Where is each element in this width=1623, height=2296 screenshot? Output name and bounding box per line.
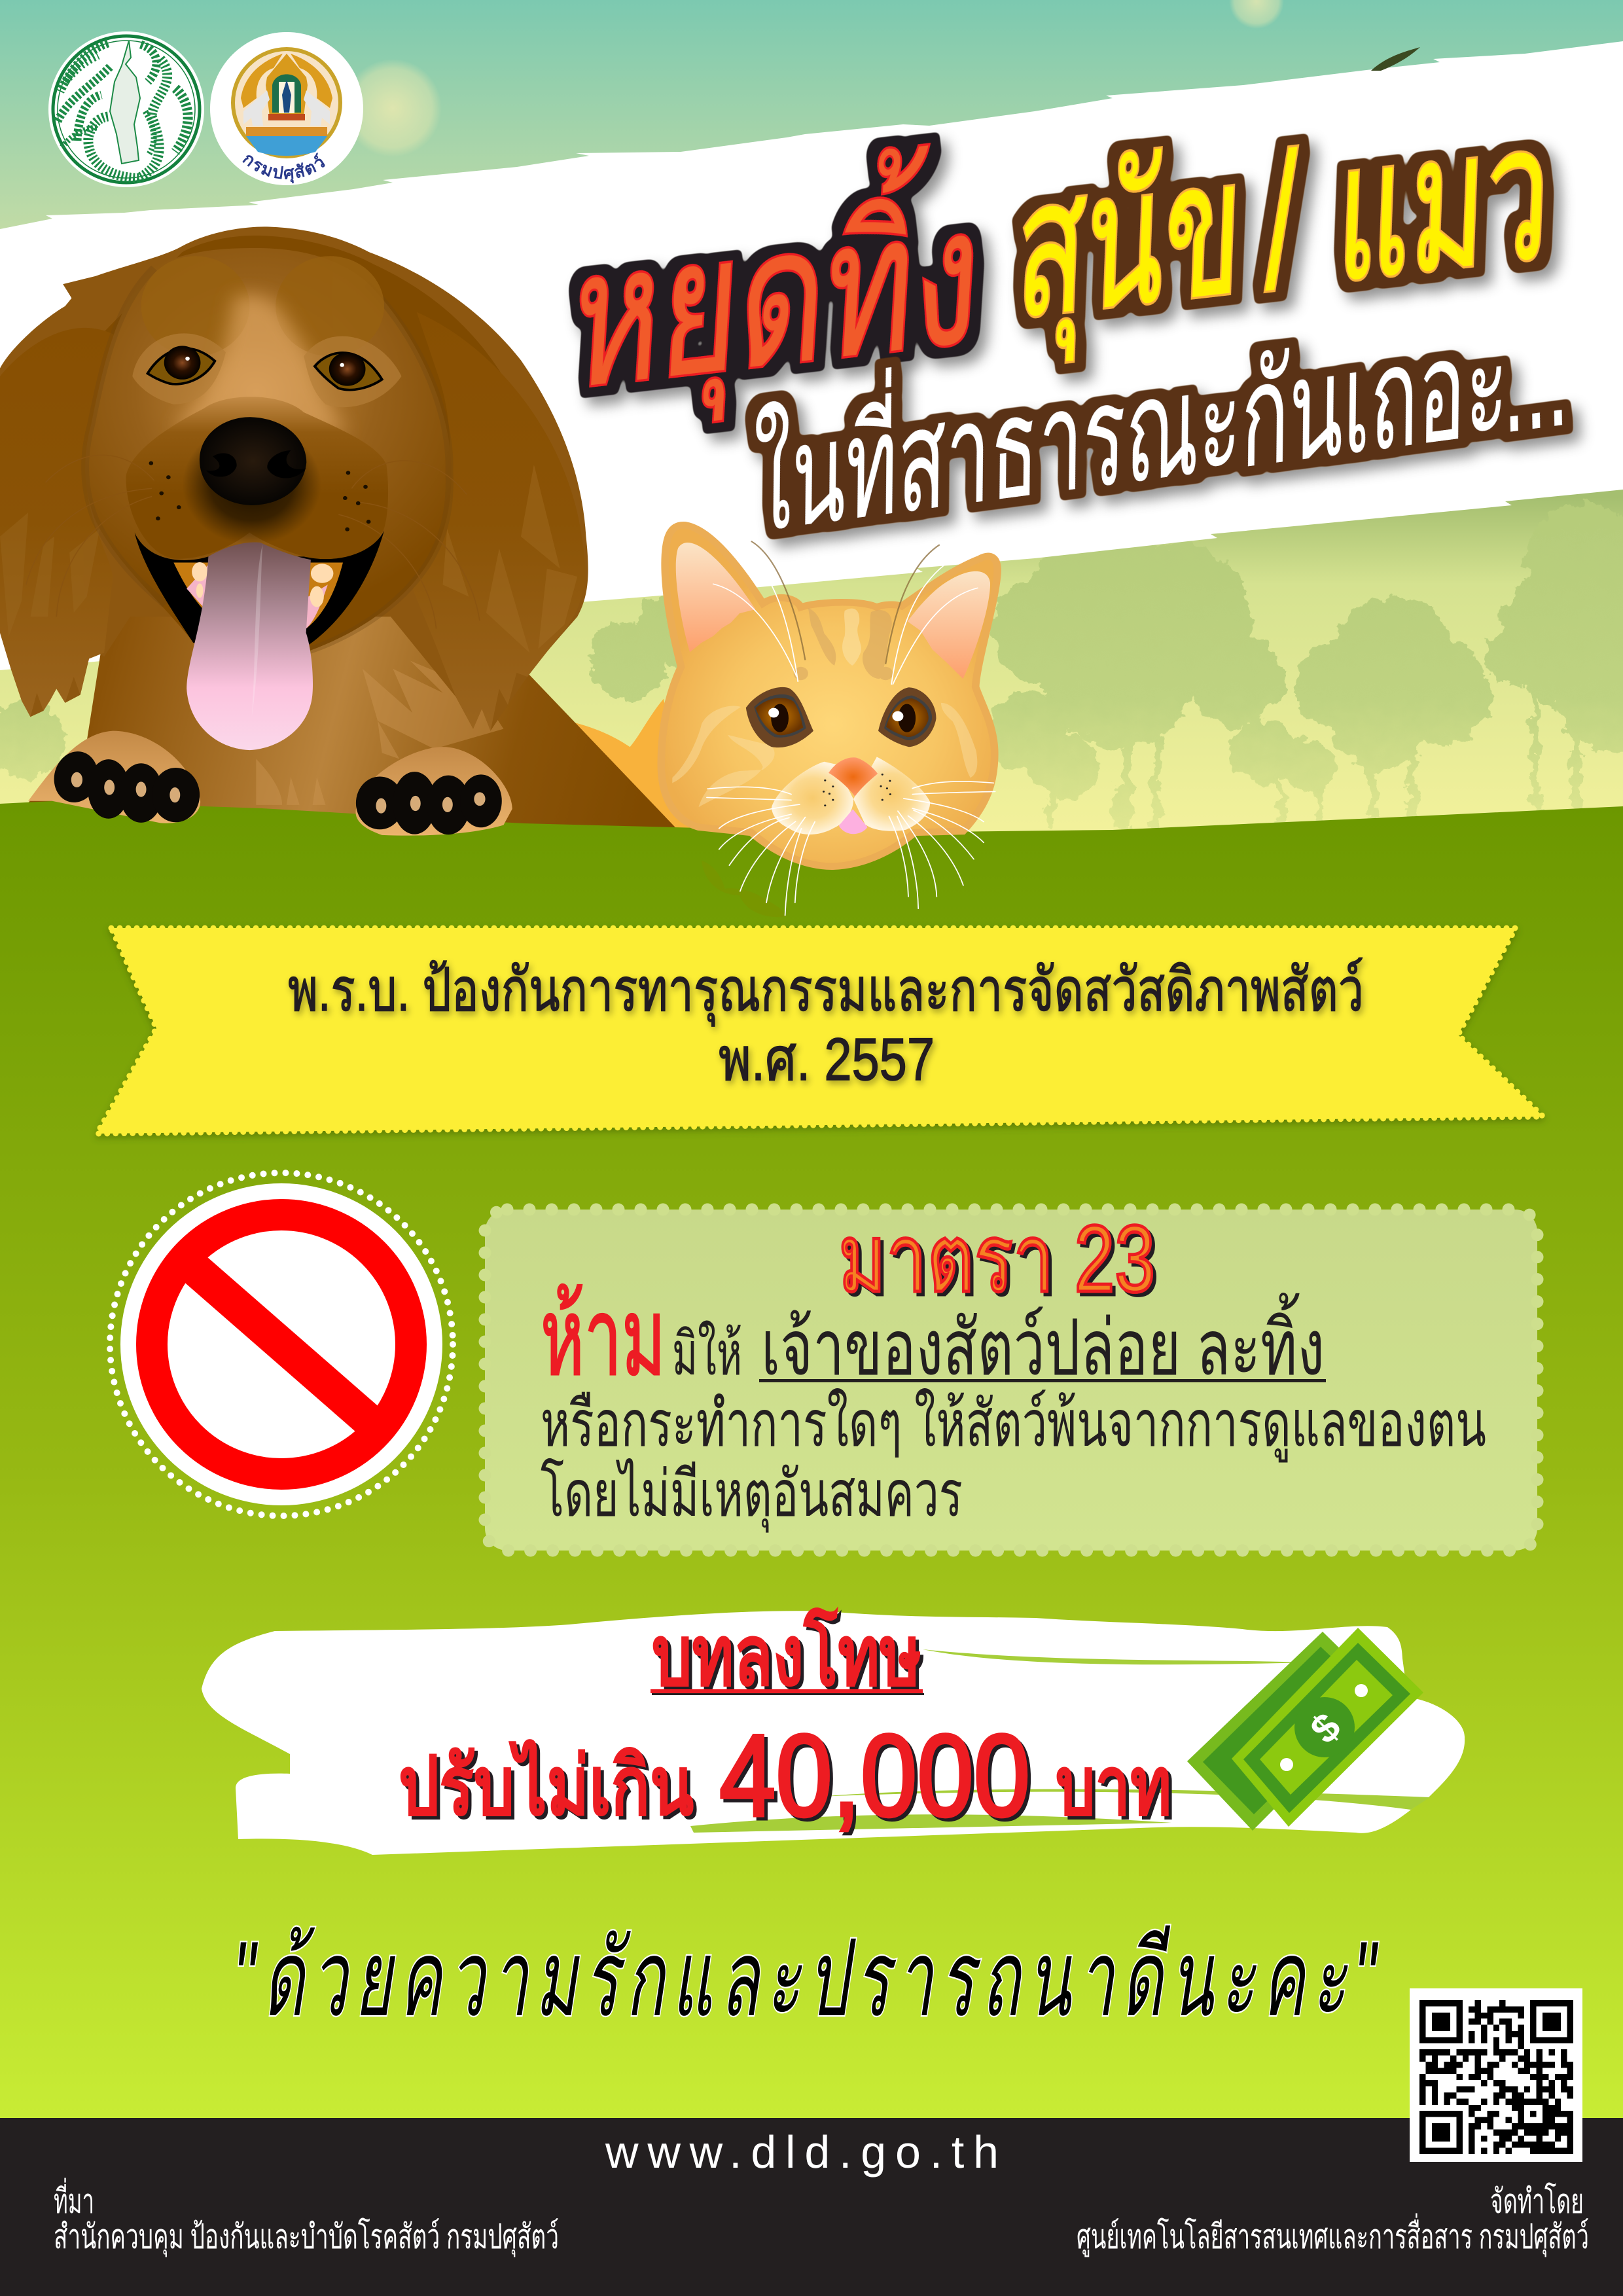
owners text: เจ้าของสัตว์ปล่อย ละทิ้ง <box>761 1293 1325 1391</box>
ribbon <box>97 928 1543 1134</box>
fine text: บาท <box>1056 1741 1171 1832</box>
cat forehead light stripe <box>842 609 861 666</box>
cat whiskers and eyebrow hairs <box>707 565 995 915</box>
dog mouth <box>135 531 384 647</box>
prohibition sign <box>110 1173 453 1516</box>
prohibition lead-in: มิให้ <box>672 1321 742 1388</box>
logo caption: กรมปศุสัตว์ <box>242 152 325 183</box>
background: tree band <box>0 262 1623 851</box>
icon: banknotes: $ <box>1302 1704 1349 1752</box>
dog illustration <box>0 226 588 836</box>
QR code <box>1410 1988 1582 2162</box>
dog body <box>26 577 677 837</box>
dog tongue crease <box>252 545 262 717</box>
cat forehead stripes <box>794 608 893 680</box>
background: sky <box>0 0 1623 275</box>
dog eye left <box>132 333 226 404</box>
underline <box>759 1379 1326 1382</box>
leaf at banner edge <box>1371 47 1420 71</box>
fine text <box>399 1710 1171 1840</box>
white torn banner <box>0 41 1623 670</box>
dog whiskers <box>26 455 480 629</box>
penalty brush panel <box>202 1611 1465 1855</box>
cat eye left <box>746 687 813 747</box>
ground leaf shadow <box>702 861 785 917</box>
title line 1 red: หยุดทิ้ง <box>546 140 990 438</box>
dog paw left <box>28 731 200 823</box>
icon: banknotes <box>1187 1628 1423 1831</box>
cat body <box>558 699 693 829</box>
penalty green strokes <box>690 1649 1430 1833</box>
prohibition word: ห้าม <box>541 1277 666 1397</box>
dog face <box>85 248 452 653</box>
cat nose <box>829 757 878 797</box>
background: tree silhouettes <box>0 504 1623 831</box>
source credit: สำนักควบคุม ป้องกันและบำบัดโรคสัตว์ กรมปศุสัตว์ <box>54 2217 559 2257</box>
logo: royal seal <box>48 31 204 187</box>
dog centre blaze <box>173 295 348 433</box>
fine text: 40,000 <box>719 1710 1030 1840</box>
dog ear right fur streaks <box>443 465 577 653</box>
penalty heading: บทลงโทษ <box>652 1609 921 1703</box>
dog brow patches <box>141 256 384 356</box>
ribbon text: พ.ศ. 2557 <box>719 1026 935 1093</box>
website: www.dld.go.th <box>605 2126 999 2178</box>
dog eye right <box>304 336 402 407</box>
dog mouth inside and teeth <box>173 562 343 629</box>
dog ear left <box>0 328 117 717</box>
dog top of head <box>87 236 508 456</box>
dog nose <box>200 417 306 505</box>
logo: department of livestock <box>210 32 363 185</box>
ribbon text <box>288 957 1364 1093</box>
cat ear right inner <box>908 571 990 679</box>
dog chest fur <box>256 661 503 805</box>
panel: section 23 <box>485 1206 1537 1551</box>
source credit <box>54 2178 559 2257</box>
body line 2: โดยไม่มีเหตุอันสมควร <box>541 1458 963 1533</box>
dog ear right <box>412 312 585 731</box>
source credit: ที่มา <box>54 2178 94 2221</box>
dog nose shadow <box>183 424 321 545</box>
cat tongue <box>839 809 868 834</box>
dog paw right <box>355 747 512 836</box>
cat eye right <box>878 687 936 747</box>
dog muzzle <box>126 397 388 560</box>
cat whisker dots <box>823 774 891 806</box>
dog ear left fur streaks <box>0 512 100 637</box>
producer credit <box>1077 2182 1589 2257</box>
dog tongue <box>187 542 313 750</box>
cat dark brow hairs <box>751 541 940 664</box>
fine text: ปรับไม่เกิน <box>399 1741 694 1832</box>
background: lens flares <box>344 0 1284 157</box>
cat muzzle <box>772 757 930 834</box>
section heading: มาตรา 23 <box>838 1206 1155 1312</box>
dog face ring <box>85 268 450 651</box>
cat ear left inner <box>676 543 756 652</box>
slogan: "ด้วยความรักและปรารถนาดีนะคะ" <box>233 1920 1379 2038</box>
cat illustration <box>661 525 997 917</box>
dog whisker dots <box>149 461 370 531</box>
footer bar <box>0 2118 1623 2296</box>
cat cheek marks <box>672 703 977 807</box>
green ground with gradient <box>0 801 1623 2121</box>
cat head <box>661 525 997 867</box>
dog fur head and ears <box>0 226 588 731</box>
